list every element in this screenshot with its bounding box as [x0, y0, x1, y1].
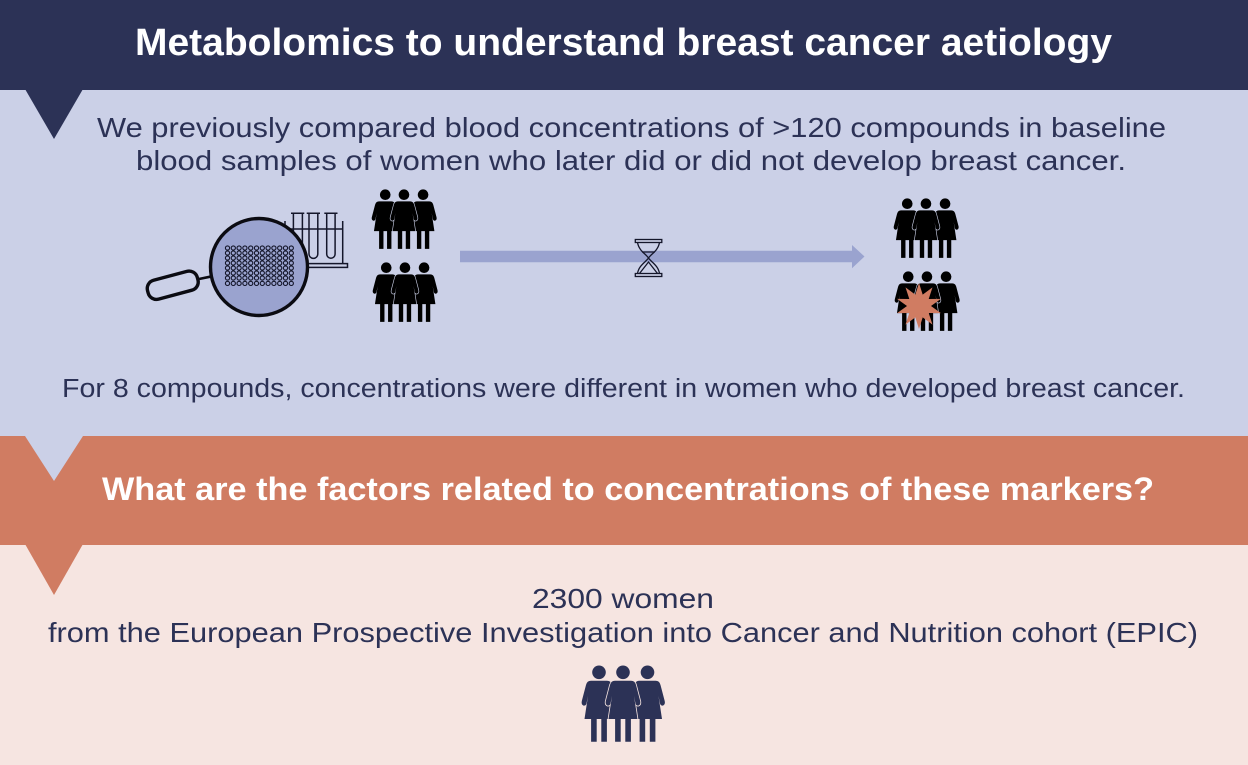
text block: cohort description: from the European Prospective Investigation into Cancer and Nutrition cohort (EPIC)	[48, 617, 1198, 648]
panel: background study section	[0, 90, 1248, 436]
text block: study introduction: blood samples of women who later did or did not develop breast cancer.	[136, 145, 1126, 176]
icon: group of women with breast cancer burst	[895, 271, 960, 331]
question: What are the factors related to concentrations of these markers?	[102, 471, 1154, 507]
title banner	[0, 0, 1248, 139]
icon: group of women, EPIC cohort	[582, 666, 665, 742]
icon: group of women, lower baseline	[373, 262, 438, 322]
sample plate dots	[225, 246, 293, 286]
icon: group of women, healthy at follow-up	[894, 198, 959, 258]
icon: hourglass	[635, 240, 662, 276]
text block: cohort description: 2300 women	[532, 583, 714, 614]
panel: cohort section	[0, 545, 1248, 765]
icon: group of women, upper baseline	[372, 189, 437, 249]
text block: cohort description	[48, 583, 1198, 648]
arrow: follow-up time	[460, 245, 864, 268]
icon: magnifying glass over sample plate	[145, 218, 308, 316]
question banner	[0, 436, 1248, 595]
text block: study introduction	[97, 112, 1166, 176]
text block: study introduction: We previously compared blood concentrations of >120 compounds in baseline	[97, 112, 1166, 143]
title: Metabolomics to understand breast cancer aetiology	[135, 22, 1112, 64]
icon: burst	[897, 283, 941, 329]
text block: finding: For 8 compounds, concentrations were different in women who developed breast cancer.	[62, 375, 1185, 403]
icon: test tubes in rack	[285, 213, 348, 267]
